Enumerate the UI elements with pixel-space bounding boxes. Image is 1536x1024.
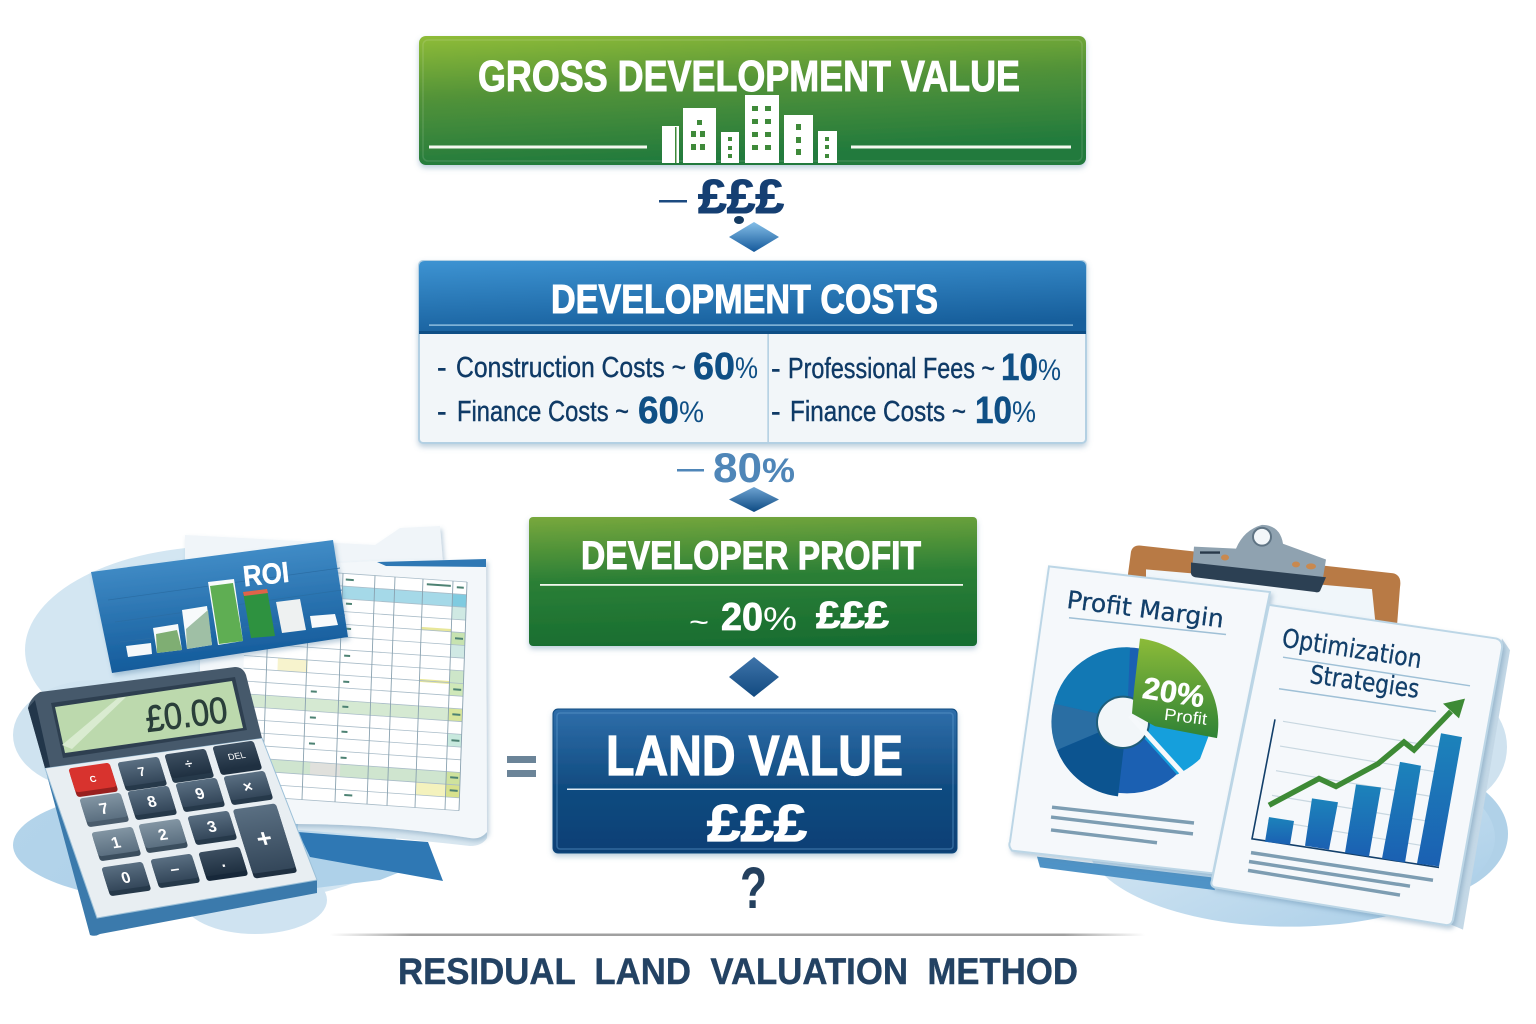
key red: C: [88, 774, 98, 784]
key red: [68, 763, 118, 797]
title: residual land valuation method: RESIDUAL LAND VALUATION METHOD: [398, 951, 1078, 992]
arrow: diamond 3: [729, 657, 779, 697]
cost: construction: [437, 346, 758, 388]
green profit wedge: 20%: [1140, 670, 1207, 714]
panel: land value: [553, 709, 957, 853]
key divide: ÷: [183, 756, 194, 771]
minus pounds: £££: [698, 171, 784, 224]
back papers: [185, 526, 444, 590]
key 0: [101, 862, 151, 896]
key 8: [127, 786, 177, 820]
profit value: %: [763, 601, 797, 637]
text lines: [1248, 853, 1433, 895]
clipboard: [1126, 546, 1400, 638]
ROI label: ROI: [242, 557, 291, 593]
pointer: [1130, 715, 1198, 790]
key 3: 3: [205, 819, 219, 836]
background blobs right: [1085, 686, 1508, 927]
cost: finance left: %: [679, 396, 704, 429]
cost: finance left: [437, 390, 704, 432]
right report page: [1211, 605, 1510, 930]
text: profit margin: Profit Margin: [1065, 585, 1226, 634]
key minus: [150, 854, 200, 888]
minus pounds: [659, 171, 784, 224]
key times: [223, 771, 273, 805]
key dot: .: [218, 854, 228, 871]
spreadsheet grid: [239, 567, 467, 811]
text: optimization strategies: Strategies: [1308, 660, 1421, 705]
cost: finance right: %: [1012, 396, 1036, 429]
blue folder: [298, 832, 443, 881]
calculator body: [28, 667, 317, 936]
minus 80 percent: %: [762, 452, 795, 490]
key 0: 0: [119, 870, 133, 887]
key 9: [175, 778, 225, 812]
key 8: 8: [145, 794, 159, 811]
keypad: [68, 741, 297, 896]
key 7 lower: [79, 793, 129, 827]
green profit wedge: Profit: [1163, 705, 1209, 729]
key 1: [91, 827, 141, 861]
cost: finance right: [771, 390, 1036, 432]
cost: finance left: 60: [638, 390, 679, 432]
profit value: £££: [816, 595, 889, 637]
bar chart with growth arrow: [1252, 699, 1465, 867]
key plus: +: [253, 825, 276, 854]
text lines: [1051, 807, 1194, 843]
cost: construction: -: [437, 352, 447, 384]
key 2: [138, 819, 188, 853]
cost: finance right: Finance Costs ~: [790, 396, 966, 428]
costs header: DEVELOPMENT COSTS: [551, 276, 938, 322]
key 2: 2: [156, 827, 170, 844]
donut chart: [1052, 638, 1218, 802]
cost: professional fees: %: [1038, 354, 1061, 387]
key 7 lower: 7: [97, 801, 111, 818]
key del: DEL: [227, 750, 247, 762]
key del: [212, 741, 262, 775]
equals sign: [507, 756, 536, 777]
illustration: calculator and spreadsheet: [13, 526, 487, 936]
panel: development costs: [419, 261, 1086, 443]
key 7: 7: [136, 764, 147, 779]
panel: developer profit: [529, 517, 977, 646]
cost: professional fees: [771, 347, 1061, 389]
key 9: 9: [193, 786, 207, 803]
key plus: [233, 803, 297, 879]
clipboard clip: [1191, 525, 1326, 592]
text: optimization strategies: Optimization: [1280, 624, 1424, 675]
costs header: [419, 261, 1086, 334]
illustration: reports on clipboard: [1009, 525, 1510, 930]
cost: professional fees: -: [771, 353, 781, 385]
text: optimization strategies: [1279, 624, 1470, 711]
calculator screen: [51, 677, 247, 758]
land value pounds: £££: [707, 795, 807, 853]
key dot: [198, 847, 248, 881]
key 1: 1: [109, 835, 123, 852]
minus 80 percent: [677, 444, 795, 491]
profit value: 20: [721, 596, 763, 639]
cost: construction: Construction Costs ~: [456, 352, 686, 384]
arrow: diamond 1: [729, 222, 779, 252]
profit value: ~: [689, 606, 709, 639]
green profit wedge: [1132, 638, 1218, 738]
calculator: [28, 667, 317, 936]
key minus: –: [168, 861, 182, 878]
key times: ×: [241, 779, 255, 796]
calculator screen: £0.00: [143, 689, 230, 740]
left report page: [1009, 566, 1270, 890]
ROI bars: [126, 579, 338, 657]
key divide: [164, 749, 214, 783]
key 7: [117, 757, 167, 791]
heading: developer profit: DEVELOPER PROFIT: [581, 534, 921, 578]
ROI bar chart card: [91, 540, 348, 673]
key 3: [187, 811, 237, 845]
cost: construction: 60: [693, 346, 735, 388]
cost: construction: %: [735, 352, 758, 385]
sheet paper: [298, 815, 487, 846]
question mark: ?: [740, 856, 767, 921]
profit value: [689, 595, 889, 639]
heading: gross development value: GROSS DEVELOPMENT VALUE: [478, 52, 1020, 101]
panel: gross development value: [419, 36, 1086, 165]
cost: finance left: -: [437, 396, 447, 428]
heading: land value: LAND VALUE: [606, 724, 903, 788]
cost: finance left: Finance Costs ~: [457, 396, 629, 428]
background blobs left: [13, 546, 430, 934]
icon: city skyline: [429, 95, 1071, 163]
cost: professional fees: 10: [1001, 347, 1038, 389]
cost: finance right: -: [771, 396, 781, 428]
cost: finance right: 10: [975, 390, 1012, 432]
cost: professional fees: Professional Fees ~: [788, 353, 995, 385]
minus 80 percent: 80: [713, 444, 762, 491]
spreadsheet: [200, 559, 487, 846]
arrow: diamond 2: [729, 487, 779, 512]
